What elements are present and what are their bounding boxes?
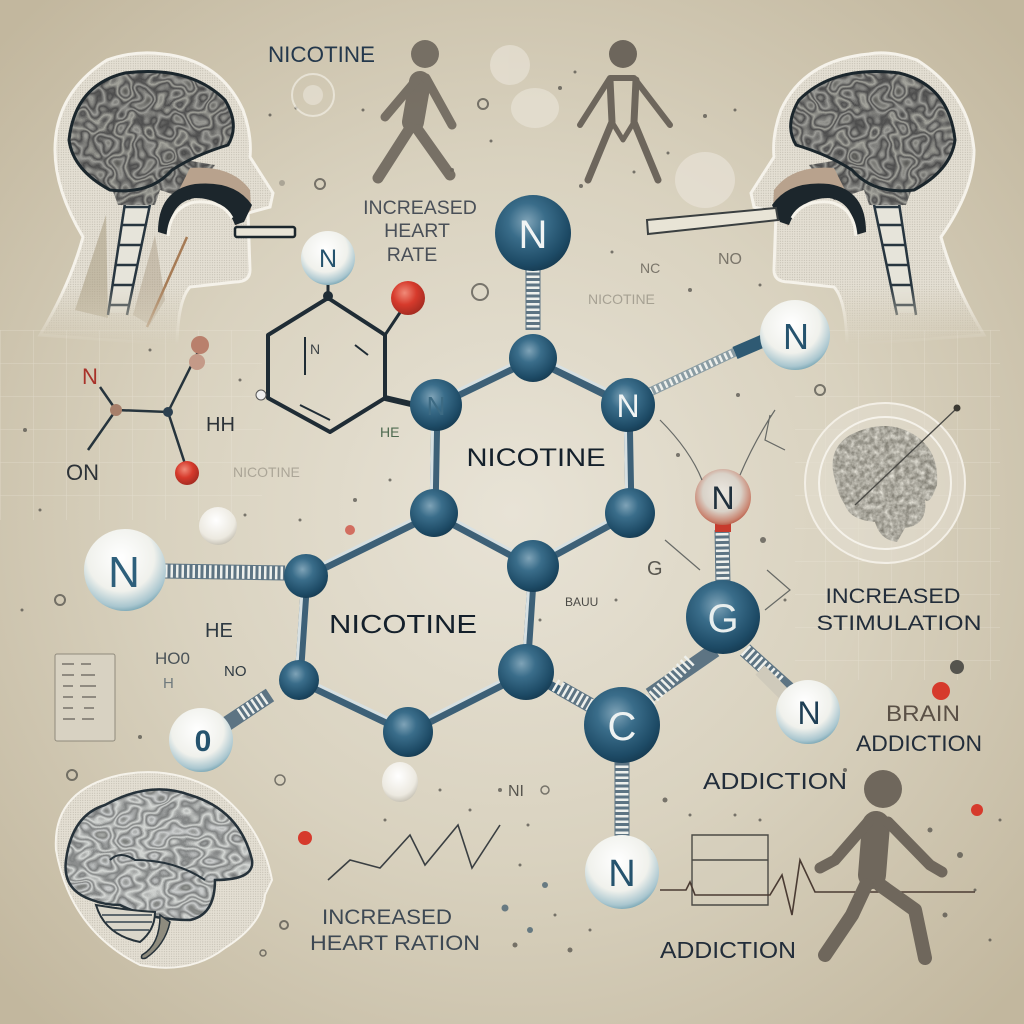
chemical labels left [155, 620, 246, 692]
atom: white O: 0 [195, 725, 211, 758]
label: addiction middle: ADDICTION [703, 768, 847, 794]
ecg line [660, 860, 975, 915]
brain: bottom left [56, 772, 272, 968]
label: brain addiction: BRAIN [886, 701, 960, 726]
small red dot near figure [971, 804, 983, 816]
small hexagon molecule: N [310, 341, 320, 357]
atom: red N: N [711, 480, 735, 516]
label: brain addiction: ADDICTION [856, 731, 982, 756]
small branching molecule: ON [66, 460, 99, 485]
zigzag chart [328, 825, 500, 880]
figure: walking person bottom right [820, 770, 942, 958]
label: nicotine upper ring: NICOTINE [466, 444, 606, 472]
faint background labels: NO [718, 251, 742, 268]
atom: white N upper right [760, 300, 830, 370]
top label: nicotine: NICOTINE [268, 42, 375, 67]
atom: white O [169, 708, 233, 772]
faint background labels: BAUU [565, 595, 598, 609]
atom: ring centre [507, 540, 559, 592]
small red atom [298, 831, 312, 845]
atom: white N upper right: N [783, 316, 809, 357]
small branching molecule: N [82, 364, 98, 389]
box diagram [692, 835, 768, 905]
atom: red N [695, 469, 751, 525]
atom: N top [495, 195, 571, 271]
figure: walking person top left [378, 40, 452, 178]
faint background labels [233, 251, 742, 800]
atom: N top: N [519, 213, 547, 257]
left graph grid [0, 330, 262, 520]
label: increased heart rate: INCREASED [363, 197, 477, 219]
label: increased heart rate: RATE [387, 244, 437, 266]
label: increased heart ration: HEART RATION [310, 932, 480, 955]
atom: N ring left: N [427, 391, 445, 421]
atom: lower ring right [498, 644, 554, 700]
faint background labels: NC [640, 260, 660, 276]
atom: N ring right [601, 378, 655, 432]
atom: lower ring left bottom [279, 660, 319, 700]
label: nicotine lower ring: NICOTINE [329, 609, 477, 639]
table card [55, 654, 115, 741]
head: left cross-section [40, 53, 295, 345]
label: increased heart rate [363, 197, 477, 266]
faint background labels: NI [508, 783, 524, 800]
right graph grid [795, 330, 1000, 680]
brain: left head [69, 72, 233, 191]
chemical labels left: H [163, 675, 174, 692]
atom: upper ring top [509, 334, 557, 382]
label: increased stimulation: INCREASED [826, 584, 960, 608]
faint background labels: NICOTINE [233, 464, 300, 480]
panel: brain circle lens [805, 403, 965, 563]
label: addiction bottom: ADDICTION [660, 937, 796, 963]
chemical labels left: HO0 [155, 649, 190, 668]
cigarette: right [647, 208, 778, 234]
faint background labels: G [647, 558, 663, 580]
chemical labels left: NO [224, 663, 246, 680]
atom: white N bottom [585, 835, 659, 909]
label: brain addiction [856, 660, 982, 756]
small branching molecule: HH [206, 414, 235, 436]
thin connector curves [660, 410, 790, 610]
atom: lower ring bottom [383, 707, 433, 757]
label: increased heart rate: HEART [384, 220, 450, 242]
label: increased stimulation [816, 584, 982, 635]
label: increased stimulation: STIMULATION [816, 611, 982, 635]
atom: white N lower right: N [797, 695, 821, 731]
atom: ring lower left [410, 489, 458, 537]
cigarette: left [235, 227, 295, 237]
atom: white N left: N [108, 548, 140, 597]
atom: white N left [84, 529, 166, 611]
white sphere below ring [382, 762, 418, 802]
atom: N ring right: N [616, 388, 640, 424]
small branching molecule [66, 336, 235, 485]
atom: white N bottom: N [608, 853, 636, 895]
atom: C: C [608, 705, 636, 749]
atom: G [686, 580, 760, 654]
atom: white N lower right [776, 680, 840, 744]
chemical labels left: HE [205, 620, 233, 642]
head: right cross-section [751, 53, 984, 345]
molecule bonds [165, 270, 795, 840]
atom: G: G [707, 597, 739, 641]
atom: white N small ring [301, 231, 355, 285]
atom: C [584, 687, 660, 763]
label: increased heart ration [310, 906, 480, 955]
atom: white N small ring: N [319, 245, 337, 273]
atom: N ring left [410, 379, 462, 431]
pale blobs [292, 45, 735, 208]
label: increased heart ration: INCREASED [322, 906, 452, 929]
faint background labels: HE [380, 424, 399, 440]
red atom [391, 281, 425, 315]
atom: lower ring left top [284, 554, 328, 598]
faint background labels: NICOTINE [588, 291, 655, 307]
white sphere near centre-left [199, 507, 237, 545]
small hexagon molecule [256, 280, 415, 432]
figure: standing person top right [580, 40, 670, 180]
atom: ring lower right [605, 488, 655, 538]
